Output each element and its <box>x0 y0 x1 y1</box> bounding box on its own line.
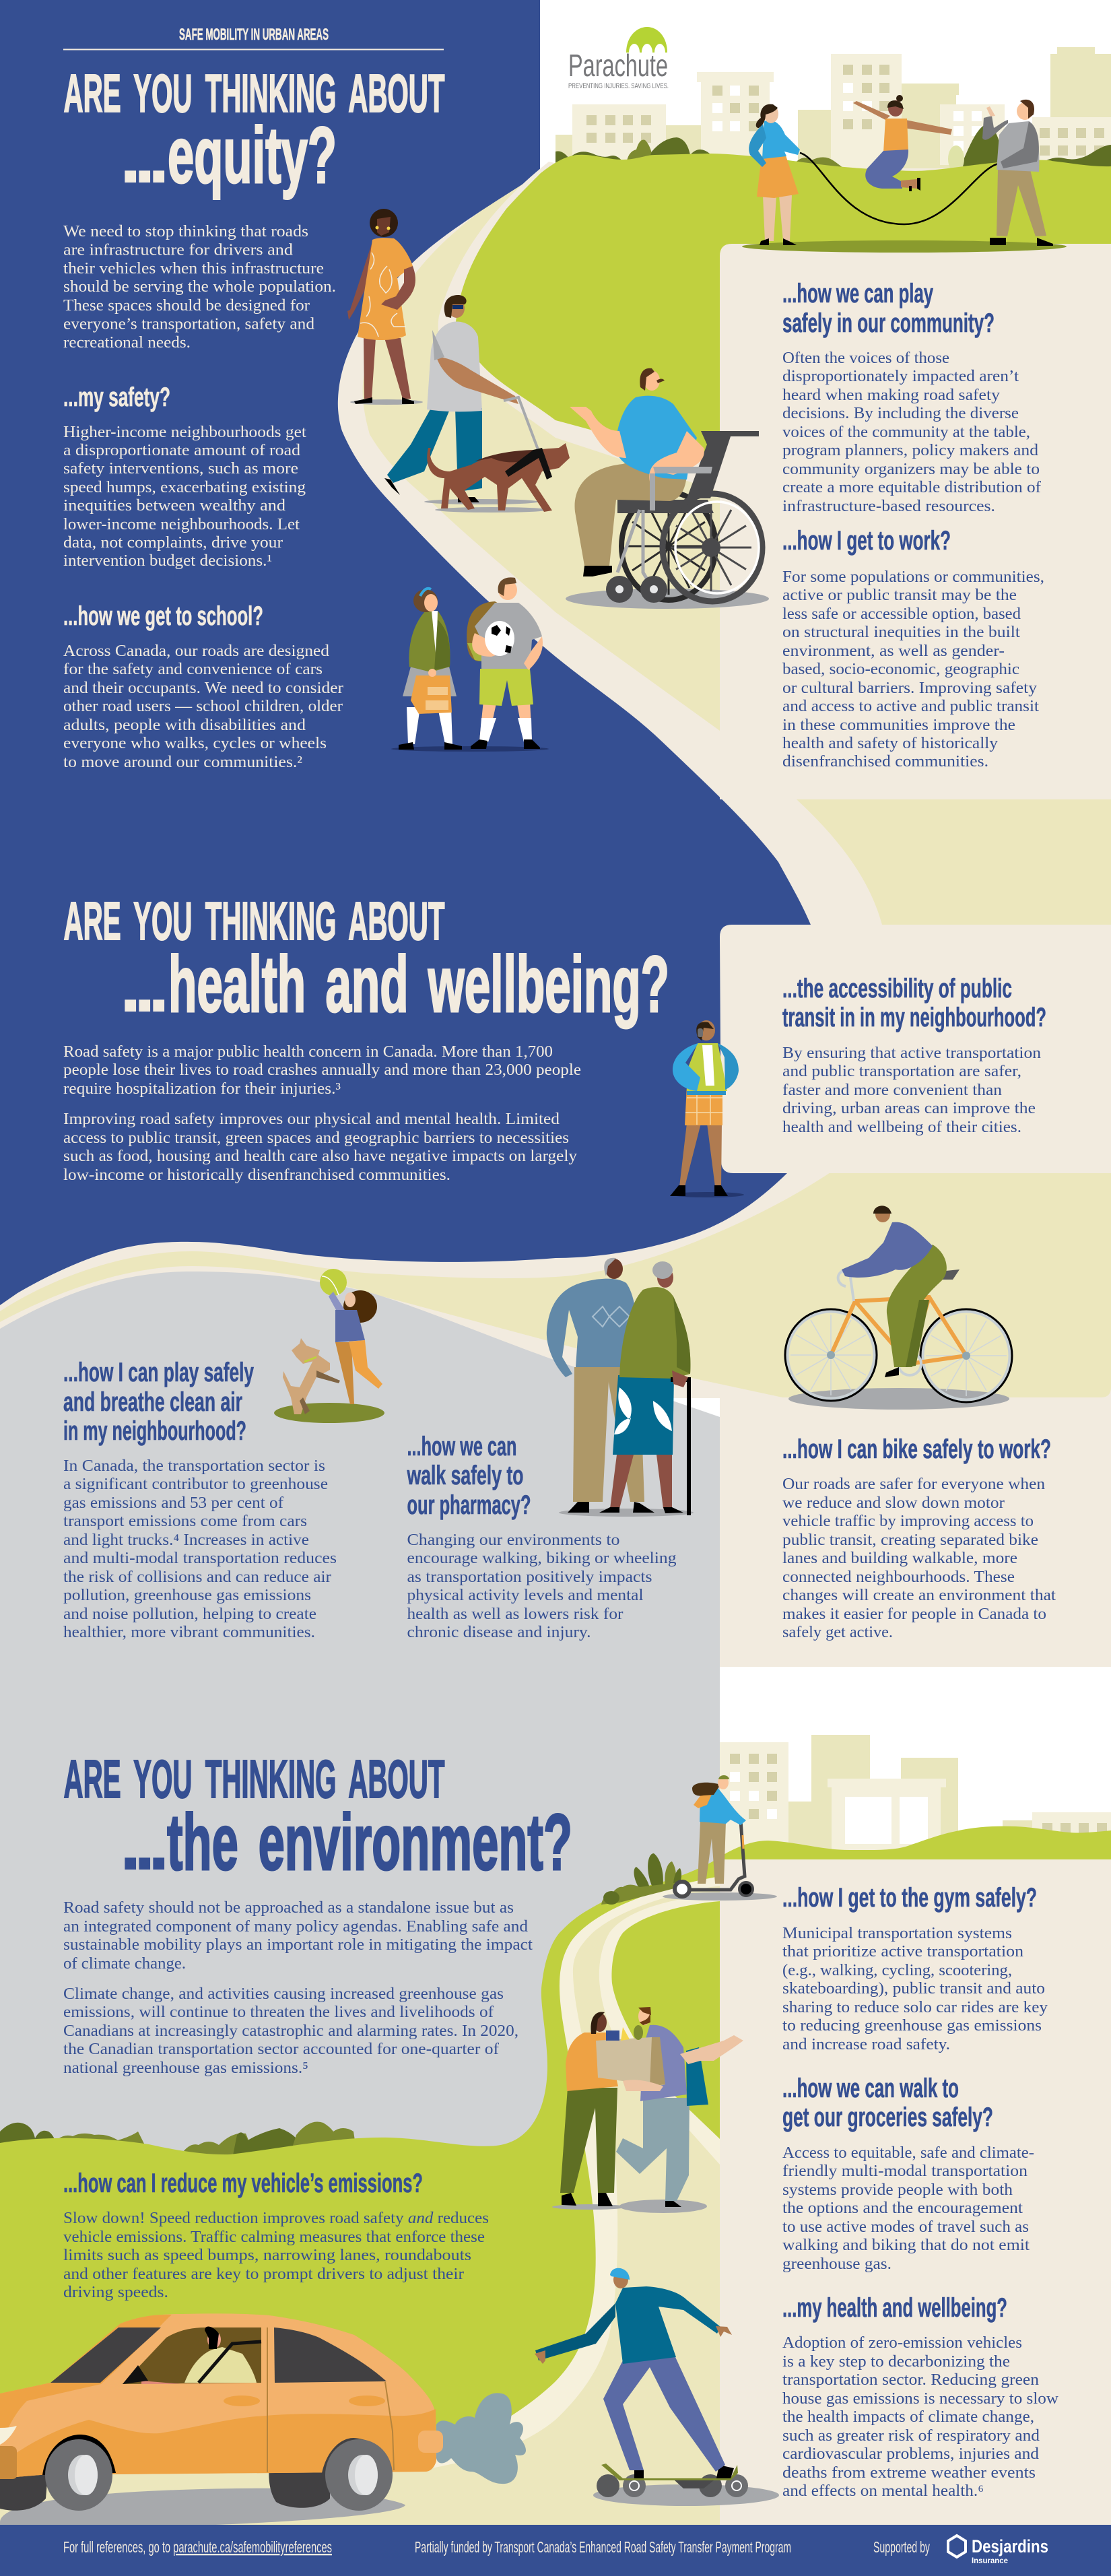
text: play safely in our community <box>782 350 1041 515</box>
illustration: woman in orange dress <box>347 209 423 405</box>
road: upper road inner edge <box>438 162 720 492</box>
text: play safely and breathe clean air: gas emissions and 53 per cent of <box>63 1494 283 1512</box>
kicker: safe mobility in urban areas: SAFE MOBILITY IN URBAN AREAS <box>179 26 329 44</box>
text: bike safely to work: makes it easier for people in Canada to <box>782 1606 1046 1623</box>
text: health and wellbeing intro <box>63 1043 581 1184</box>
text: play safely and breathe clean air: In Canada, the transportation sector is <box>63 1457 325 1475</box>
text: how we get to school: to move around our communities.² <box>63 754 302 771</box>
figure: woman with groceries <box>560 2012 618 2206</box>
text: my safety: lower-income neighbourhoods. Let <box>63 516 300 533</box>
text: play safely in our community: create a more equitable distribution of <box>782 479 1041 496</box>
text: bike safely to work <box>782 1476 1056 1641</box>
text: how I get to work: and access to active and public transit <box>782 698 1039 715</box>
heading: play safely in our community: ...how we can play <box>782 279 933 308</box>
heading: how I get to work: ...how I get to work? <box>782 526 951 556</box>
text: play safely and breathe clean air <box>63 1457 337 1641</box>
text: reduce vehicle emissions: limits such as speed bumps, narrowing lanes, roundabouts <box>63 2247 471 2264</box>
text: bike safely to work: changes will create an environment that <box>782 1587 1056 1604</box>
figure: older woman with cane <box>599 1261 691 1515</box>
footer <box>0 2525 1111 2576</box>
text: equity intro: their vehicles when this infrastructure <box>63 260 324 277</box>
text: environment intro: an integrated component of many policy agendas. Enabling safe and <box>63 1918 528 1936</box>
heading: walk safely to our pharmacy <box>407 1432 531 1520</box>
icon: grocery bag <box>596 2025 665 2091</box>
text: play safely and breathe clean air: transport emissions come from cars <box>63 1513 307 1530</box>
text: health and wellbeing intro: require hospitalization for their injuries.³ <box>63 1080 341 1098</box>
text: how I get to work: disenfranchised communities. <box>782 753 988 770</box>
text: bike safely to work: vehicle traffic by improving access to <box>782 1513 1034 1530</box>
title: health and wellbeing: ARE YOU THINKING ABOUT <box>63 891 445 951</box>
text: environment intro: emissions, will continue to threaten the lives and livelihoods of <box>63 2004 494 2021</box>
text: accessibility of public transit: faster and more convenient than <box>782 1082 1002 1099</box>
heading: play safely in our community <box>782 279 995 338</box>
text: walk safely to our pharmacy: health as well as lowers risk for <box>407 1606 624 1623</box>
text: play safely in our community: program planners, policy makers and <box>782 442 1038 459</box>
text: walk to get groceries: systems provide people with both <box>782 2181 1013 2199</box>
heading: my safety: ...my safety? <box>63 383 170 412</box>
car: body <box>0 2313 436 2478</box>
text: my safety: data, not complaints, drive your <box>63 534 283 552</box>
figure: woman catching ball <box>320 1269 382 1404</box>
text: my health and wellbeing: such as greater risk of respiratory and <box>782 2427 1040 2445</box>
text: my health and wellbeing: cardiovascular problems, injuries and <box>782 2445 1039 2463</box>
text: accessibility of public transit: and public transportation are safer, <box>782 1063 1021 1080</box>
text: my safety: a disproportionate amount of road <box>63 442 300 459</box>
text: reduce vehicle emissions <box>63 2210 489 2301</box>
logo: Desjardins <box>948 2536 1048 2565</box>
text: walk to get groceries: the options and the encouragement <box>782 2200 1023 2217</box>
text: environment intro: national greenhouse gas emissions.⁵ <box>63 2059 308 2077</box>
text: how we get to school: for the safety and convenience of cars <box>63 661 323 678</box>
text: bike safely to work: lanes and building walkable, more <box>782 1550 1017 1567</box>
text: walk safely to our pharmacy: as transportation positively impacts <box>407 1568 652 1586</box>
title: equity: ... <box>119 111 170 200</box>
text: how we get to school <box>63 642 343 771</box>
figure: guide dog <box>427 443 570 513</box>
text: reduce vehicle emissions: driving speeds. <box>63 2284 168 2301</box>
logo: Parachute <box>568 27 669 90</box>
illustration: woman on e-scooter <box>601 1775 777 1905</box>
footer: funding: Partially funded by Transport Canada’s Enhanced Road Safety Transfer Payment Program <box>415 2538 791 2556</box>
text: equity intro: These spaces should be designed for <box>63 297 310 315</box>
road: inner road edge <box>599 1894 720 2165</box>
title: health and wellbeing: ... <box>119 940 170 1029</box>
text: health and wellbeing intro: people lose their lives to road crashes annually and more than 23,000 people <box>63 1061 581 1079</box>
text: walk to get groceries: greenhouse gas. <box>782 2255 891 2273</box>
icon: exhaust cloud <box>436 2393 526 2484</box>
text: play safely in our community: heard when making road safety <box>782 387 1000 404</box>
skyline: top city buildings <box>556 47 1111 170</box>
text: how I get to work <box>782 568 1044 770</box>
logo: Desjardins: Desjardins <box>972 2536 1048 2556</box>
text: play safely and breathe clean air: pollution, greenhouse gas emissions <box>63 1587 311 1604</box>
car: rear tyres <box>0 2465 330 2511</box>
text: bike safely to work: safely get active. <box>782 1624 893 1641</box>
text: my health and wellbeing <box>782 2334 1059 2500</box>
logo: Parachute: PREVENTING INJURIES. SAVING LIVES. <box>568 82 669 90</box>
panel: bike safely <box>782 1397 1111 1667</box>
text: walk to get groceries: to use active modes of travel such as <box>782 2218 1029 2236</box>
illustration: skipping rope trio <box>742 95 1067 253</box>
text: health and wellbeing intro: Road safety is a major public health concern in Canada. More than 1,700 <box>63 1043 553 1061</box>
text: play safely in our community: Often the voices of those <box>782 350 949 367</box>
heading: play safely and breathe clean air <box>63 1358 254 1446</box>
text: reduce vehicle emissions: Slow down! Speed reduction improves road safety and reduces <box>63 2210 489 2227</box>
background: upper road surface <box>363 172 720 731</box>
title: equity: ARE YOU THINKING ABOUT <box>63 63 445 123</box>
heading: walk to get groceries: ...how we can walk to <box>782 2074 959 2103</box>
text: bike safely to work: Our roads are safer for everyone when <box>782 1476 1045 1493</box>
text: how I get to work: in these communities improve the <box>782 717 1015 734</box>
background: lower green hill <box>0 1826 1111 2525</box>
text: get to the gym safely: that prioritize active transportation <box>782 1943 1023 1960</box>
text: play safely in our community: community organizers may be able to <box>782 461 1040 478</box>
heading: walk to get groceries: get our groceries safely? <box>782 2103 993 2132</box>
text: environment intro <box>63 1899 533 2077</box>
text: get to the gym safely: skateboarding), public transit and auto <box>782 1980 1045 1997</box>
figure: jumping dog <box>283 1338 340 1414</box>
text: how we get to school: Across Canada, our roads are designed <box>63 642 329 660</box>
bushes: lower hill <box>0 2121 356 2158</box>
text: walk safely to our pharmacy: Changing our environments to <box>407 1531 619 1549</box>
text: equity intro: recreational needs. <box>63 334 191 352</box>
footer: supported by: Supported by <box>873 2538 930 2556</box>
title: equity: equity? <box>168 111 337 200</box>
panel: accessibility of public transit <box>720 925 1111 1173</box>
illustration: school children <box>391 577 549 752</box>
illustration: car with exhaust <box>0 2313 526 2525</box>
text: play safely and breathe clean air: and multi-modal transportation reduces <box>63 1550 337 1567</box>
text: health and wellbeing intro: low-income or historically disenfranchised communities. <box>63 1166 450 1184</box>
text: play safely and breathe clean air: and noise pollution, helping to create <box>63 1606 316 1623</box>
footer: references: For full references, go to parachute.ca/safemobilityreferences <box>63 2538 332 2556</box>
text: my health and wellbeing: house gas emissions is necessary to slow <box>782 2390 1059 2408</box>
text: environment intro: Road safety should not be approached as a standalone issue but as <box>63 1899 514 1917</box>
heading: walk to get groceries <box>782 2074 993 2132</box>
text: bike safely to work: connected neighbourhoods. These <box>782 1568 1015 1586</box>
figure: driver <box>123 2327 261 2384</box>
text: get to the gym safely: to reducing greenhouse gas emissions <box>782 2017 1042 2035</box>
text: play safely and breathe clean air: a significant contributor to greenhouse <box>63 1476 328 1493</box>
illustration: man with white cane and guide dog <box>384 295 570 513</box>
text: how I get to work: active or public transit may be the <box>782 587 1017 604</box>
background: middle road surface <box>0 799 1111 1397</box>
text: get to the gym safely <box>782 1925 1048 2053</box>
text: my health and wellbeing: the health impacts of climate change, <box>782 2408 1034 2426</box>
text: environment intro: the Canadian transportation sector accounted for one-quarter of <box>63 2041 499 2058</box>
text: my health and wellbeing: is a key step to decarbonizing the <box>782 2353 1010 2371</box>
text: get to the gym safely: Municipal transportation systems <box>782 1925 1012 1942</box>
text: environment intro: Climate change, and activities causing increased greenhouse gas <box>63 1985 504 2003</box>
text: how we get to school: everyone who walks, cycles or wheels <box>63 735 327 752</box>
text: accessibility of public transit: health and wellbeing of their cities. <box>782 1119 1021 1136</box>
illustration: woman and dog with ball <box>274 1269 384 1423</box>
panel: right column equity <box>720 244 1111 799</box>
title: environment: ARE YOU THINKING ABOUT <box>63 1749 445 1809</box>
illustration: skateboarder <box>535 2268 779 2506</box>
text: get to the gym safely: and increase road safety. <box>782 2036 950 2053</box>
panel: environment right column <box>720 1859 1111 2525</box>
title: environment: the environment? <box>167 1798 572 1887</box>
text: how I get to work: less safe or accessible option, based <box>782 605 1021 623</box>
text: environment intro: Canadians at increasingly catastrophic and alarming rates. In 2020, <box>63 2022 518 2040</box>
heading: play safely and breathe clean air: ...how I can play safely <box>63 1358 254 1387</box>
text: walk safely to our pharmacy: chronic disease and injury. <box>407 1624 591 1641</box>
heading: how we get to school: ...how we get to school? <box>63 601 263 631</box>
text: get to the gym safely: sharing to reduce solo car rides are key <box>782 1999 1048 2016</box>
text: health and wellbeing intro: access to public transit, green spaces and geographic barriers to necessities <box>63 1129 569 1147</box>
figure: girl with backpack <box>399 589 462 750</box>
text: play safely in our community: decisions. By including the diverse <box>782 405 1019 422</box>
title: equity <box>63 63 445 200</box>
hill: inner green island <box>611 1901 720 2139</box>
illustration: couple carrying groceries <box>552 2007 743 2213</box>
heading: accessibility of public transit <box>782 974 1046 1032</box>
hill: upper green hill <box>455 154 1111 465</box>
text: how I get to work: based, socio-economic, geographic <box>782 661 1019 678</box>
road: lower road edge <box>0 1876 720 2525</box>
text: my safety: speed humps, exacerbating existing <box>63 479 306 496</box>
text: reduce vehicle emissions: and other features are key to prompt drivers to adjust their <box>63 2266 464 2283</box>
text: walk to get groceries: walking and biking that do not emit <box>782 2237 1030 2254</box>
text: how I get to work: on structural inequities in the built <box>782 624 1020 641</box>
text: my safety: intervention budget decisions.¹ <box>63 552 272 570</box>
road: lower road surface <box>0 1886 720 2525</box>
illustration: man in wheelchair <box>566 368 769 609</box>
illustration: elderly couple <box>547 1258 694 1517</box>
panel: grey background <box>0 1272 720 2189</box>
text: walk to get groceries: Access to equitable, safe and climate- <box>782 2144 1034 2162</box>
car: wheels <box>42 2435 116 2475</box>
text: walk safely to our pharmacy: physical activity levels and mental <box>407 1587 644 1604</box>
text: play safely and breathe clean air: the risk of collisions and can reduce air <box>63 1568 331 1586</box>
text: walk safely to our pharmacy <box>407 1531 676 1641</box>
text: how I get to work: or cultural barriers. Improving safety <box>782 680 1037 697</box>
illustration: cyclist <box>785 1206 1012 1410</box>
text: equity intro: We need to stop thinking that roads <box>63 223 308 240</box>
text: environment intro: sustainable mobility plays an important role in mitigating the impact <box>63 1936 533 1954</box>
text: how I get to work: health and safety of historically <box>782 735 998 752</box>
text: play safely and breathe clean air: and light trucks.⁴ Increases in active <box>63 1531 309 1549</box>
text: how I get to work: environment, as well as gender- <box>782 642 1005 660</box>
text: play safely and breathe clean air: healthier, more vibrant communities. <box>63 1624 315 1641</box>
text: my health and wellbeing: and effects on mental health.⁶ <box>782 2482 984 2500</box>
figure: woman holding rope <box>749 104 800 245</box>
text: my health and wellbeing: transportation sector. Reducing green <box>782 2371 1039 2389</box>
text: walk to get groceries <box>782 2144 1034 2273</box>
figure: man holding rope <box>982 100 1053 246</box>
title: environment: ... <box>119 1798 170 1887</box>
text: play safely in our community: voices of the community at the table, <box>782 424 1030 441</box>
text: equity intro: are infrastructure for drivers and <box>63 241 293 259</box>
figure: man with tote <box>616 2007 743 2207</box>
heading: walk safely to our pharmacy: our pharmacy? <box>407 1490 531 1520</box>
text: health and wellbeing intro: Improving road safety improves our physical and mental health. Limited <box>63 1111 560 1128</box>
illustration: woman with headphones <box>670 1020 744 1197</box>
heading: play safely and breathe clean air: in my neighbourhood? <box>63 1416 246 1446</box>
title: health and wellbeing: health and wellbeing? <box>168 940 669 1029</box>
heading: play safely in our community: safely in our community? <box>782 308 995 338</box>
text: my safety: inequities between wealthy and <box>63 497 285 515</box>
text: environment intro: of climate change. <box>63 1955 186 1973</box>
text: how we get to school: and their occupants. We need to consider <box>63 680 343 697</box>
text: bike safely to work: public transit, creating separated bike <box>782 1531 1038 1549</box>
text: reduce vehicle emissions: vehicle emissions. Traffic calming measures that enforce these <box>63 2228 485 2246</box>
text: my health and wellbeing: Adoption of zero-emission vehicles <box>782 2334 1022 2352</box>
text: accessibility of public transit <box>782 1045 1041 1136</box>
text: my health and wellbeing: deaths from extreme weather events <box>782 2464 1036 2482</box>
skyline: lower city buildings <box>720 1735 1111 1863</box>
text: my safety: safety interventions, such as more <box>63 460 298 477</box>
background: cream road base <box>0 168 1111 1667</box>
text: accessibility of public transit: By ensuring that active transportation <box>782 1045 1041 1062</box>
title: environment <box>63 1749 572 1887</box>
bushes: upper hill <box>556 125 1111 172</box>
figure: jumping woman <box>853 95 952 191</box>
panel: blue background <box>0 0 835 1305</box>
text: how we get to school: adults, people with disabilities and <box>63 717 306 734</box>
text: my safety: Higher-income neighbourhoods get <box>63 424 306 441</box>
text: equity intro: should be serving the whole population. <box>63 278 336 296</box>
heading: walk safely to our pharmacy: walk safely to <box>407 1461 524 1490</box>
heading: walk safely to our pharmacy: ...how we can <box>407 1432 517 1461</box>
text: walk to get groceries: friendly multi-modal transportation <box>782 2162 1028 2180</box>
text: how I get to work: For some populations or communities, <box>782 568 1044 586</box>
text: health and wellbeing intro: such as food, housing and health care also have negative impacts on largely <box>63 1148 577 1165</box>
text: how we get to school: other road users — school children, older <box>63 698 343 715</box>
heading: play safely and breathe clean air: and breathe clean air <box>63 1387 242 1417</box>
heading: reduce vehicle emissions: ...how can I reduce my vehicle’s emissions? <box>63 2169 423 2198</box>
figure: boy with soccer ball <box>467 577 543 749</box>
text: play safely in our community: infrastructure-based resources. <box>782 498 995 515</box>
figure: older man <box>547 1258 654 1513</box>
logo: Parachute: Parachute <box>568 48 668 83</box>
text: my safety <box>63 424 306 570</box>
text: accessibility of public transit: driving, urban areas can improve the <box>782 1100 1036 1117</box>
text: walk safely to our pharmacy: encourage walking, biking or wheeling <box>407 1550 676 1567</box>
text: equity intro <box>63 223 336 352</box>
text: equity intro: everyone’s transportation, safety and <box>63 315 314 333</box>
text: bike safely to work: we reduce and slow down motor <box>782 1494 1005 1512</box>
icon: plant beside scooter <box>601 1853 685 1905</box>
title: health and wellbeing <box>63 891 669 1029</box>
text: play safely in our community: disproportionately impacted aren’t <box>782 368 1019 385</box>
logo: Desjardins: Insurance <box>972 2556 1008 2565</box>
text: get to the gym safely: (e.g., walking, cycling, scootering, <box>782 1962 1012 1979</box>
